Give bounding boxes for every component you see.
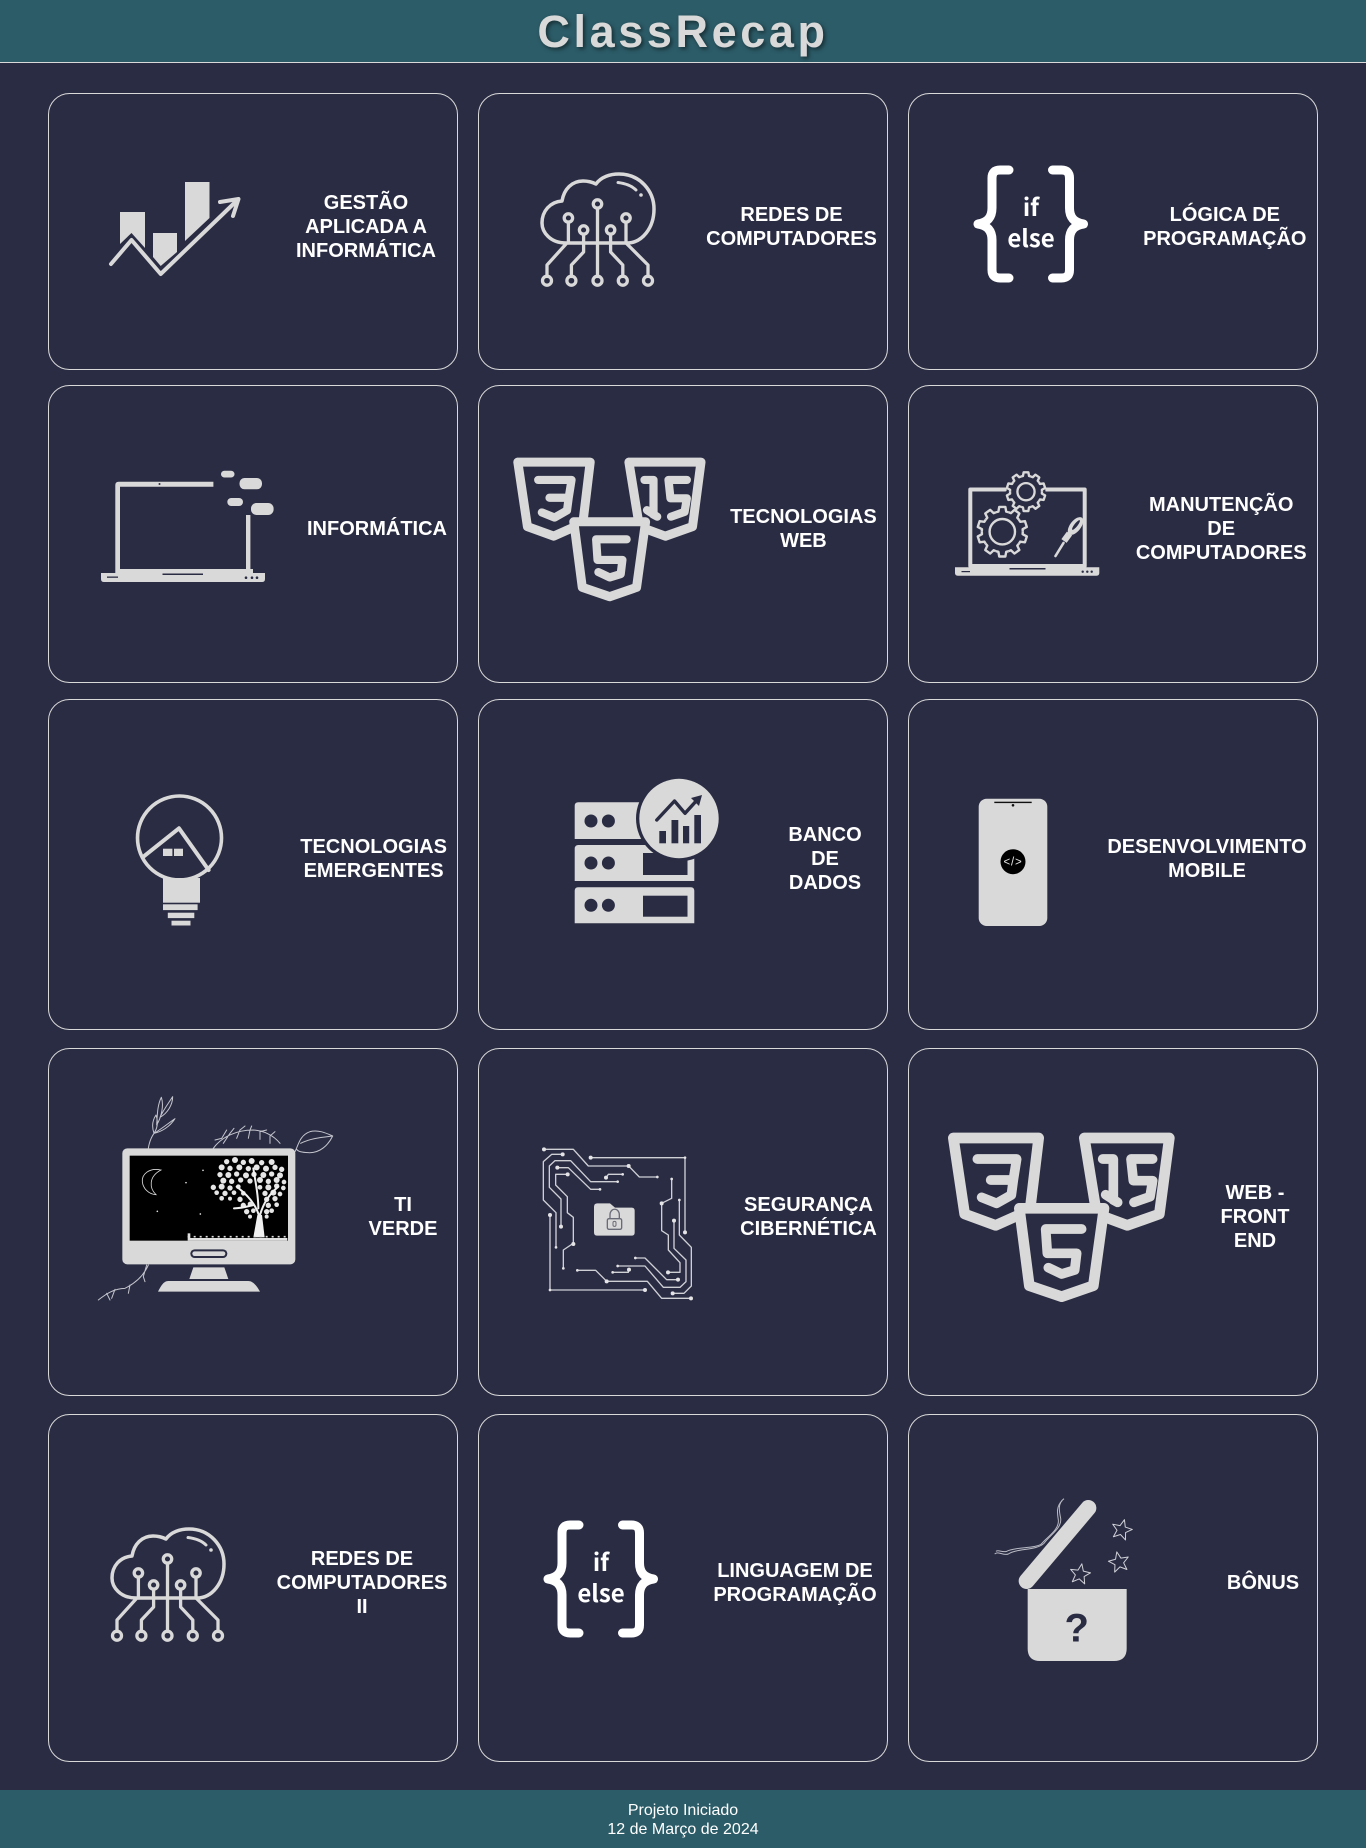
label: WEB (780, 530, 827, 552)
icon: cloud network (542, 174, 654, 285)
icon: if else braces: if (1023, 188, 1040, 223)
icon: circuit board with locked folder (542, 1147, 693, 1300)
label: APLICADA A (305, 216, 427, 238)
label: II (356, 1596, 368, 1618)
label: COMPUTADORES (1136, 542, 1307, 564)
label: DADOS (789, 872, 861, 894)
footer text: Projeto Iniciado (628, 1802, 738, 1819)
label: INFORMÁTICA (296, 239, 436, 262)
icon: monitor with tree and leaves (98, 1097, 333, 1300)
label: PROGRAMAÇÃO (713, 1583, 877, 1606)
panel: Redes de Computadores (478, 94, 888, 370)
panel: Tecnologias Web (478, 386, 888, 682)
panel: Banco de Dados (478, 700, 888, 1030)
panel: Desenvolvimento Mobile (908, 700, 1318, 1030)
icon: if else braces (978, 170, 1084, 278)
label: COMPUTADORES (706, 228, 877, 250)
panel: Redes de Computadores II (48, 1414, 458, 1762)
icon: CSS3 HTML5 JS shields large (953, 1138, 1169, 1297)
panel: Segurança Cibernética (478, 1048, 888, 1396)
label: REDES DE (740, 204, 843, 226)
panel: Lógica de Programação (908, 94, 1318, 370)
icon: smartphone (979, 799, 1047, 926)
icon: mystery box: ? (1064, 1606, 1089, 1650)
icon: laptop with pixels (101, 471, 274, 582)
panel: Tecnologias Emergentes (48, 700, 458, 1030)
label: VERDE (369, 1218, 437, 1240)
icon: if else braces: if (593, 1543, 610, 1578)
footer bar (0, 1790, 1366, 1848)
icon: smartphone: </> (1003, 857, 1023, 869)
label: END (1234, 1230, 1276, 1252)
label: REDES DE (311, 1548, 413, 1570)
icon: if else braces: else (1007, 219, 1055, 254)
icon: light bulb with house (138, 796, 222, 926)
icon: if else braces (548, 1525, 654, 1633)
label: TECNOLOGIAS (300, 836, 447, 858)
panel: Manutenção de Computadores (908, 386, 1318, 682)
label: GESTÃO (324, 192, 408, 214)
label: DESENVOLVIMENTO (1107, 836, 1307, 858)
icon: if else braces: else (577, 1574, 625, 1609)
panel: Bônus (908, 1414, 1318, 1762)
label: COMPUTADORES (277, 1572, 447, 1594)
label: CIBERNÉTICA (740, 1217, 877, 1240)
label: WEB - (1226, 1182, 1284, 1204)
label: EMERGENTES (304, 860, 444, 882)
label: MANUTENÇÃO (1149, 494, 1293, 516)
label: TI (394, 1194, 412, 1216)
icon: database servers with chart (575, 776, 722, 923)
icon: mystery box (995, 1499, 1134, 1661)
footer text: 12 de Março de 2024 (607, 1821, 759, 1838)
label: SEGURANÇA (744, 1194, 873, 1216)
label: BANCO (788, 824, 862, 846)
label: PROGRAMAÇÃO (1143, 227, 1306, 250)
label: DE (1207, 518, 1235, 540)
footer text (607, 1802, 759, 1838)
label: LÓGICA DE (1170, 204, 1280, 226)
panel: Linguagem de Programação (478, 1414, 888, 1762)
header bar with title (0, 0, 1366, 63)
label: MOBILE (1168, 860, 1246, 882)
label: BÔNUS (1227, 1570, 1299, 1594)
icon: laptop with gears and screwdriver (955, 472, 1099, 576)
panel: Web - Front End (908, 1048, 1318, 1396)
panel: Informática (48, 386, 458, 682)
label: DE (811, 848, 839, 870)
label: FRONT (1221, 1206, 1289, 1228)
label: TECNOLOGIAS (730, 506, 877, 528)
icon: rising chart with arrow (111, 182, 238, 274)
panel: TI Verde (48, 1048, 458, 1396)
label: INFORMÁTICA (307, 517, 447, 540)
icon: CSS3 HTML5 JS shields (518, 462, 701, 597)
icon: cloud network (112, 1529, 224, 1640)
panel: Gestão Aplicada a Informática (48, 94, 458, 370)
title: ClassRecap (537, 6, 829, 57)
label: LINGUAGEM DE (717, 1560, 873, 1582)
